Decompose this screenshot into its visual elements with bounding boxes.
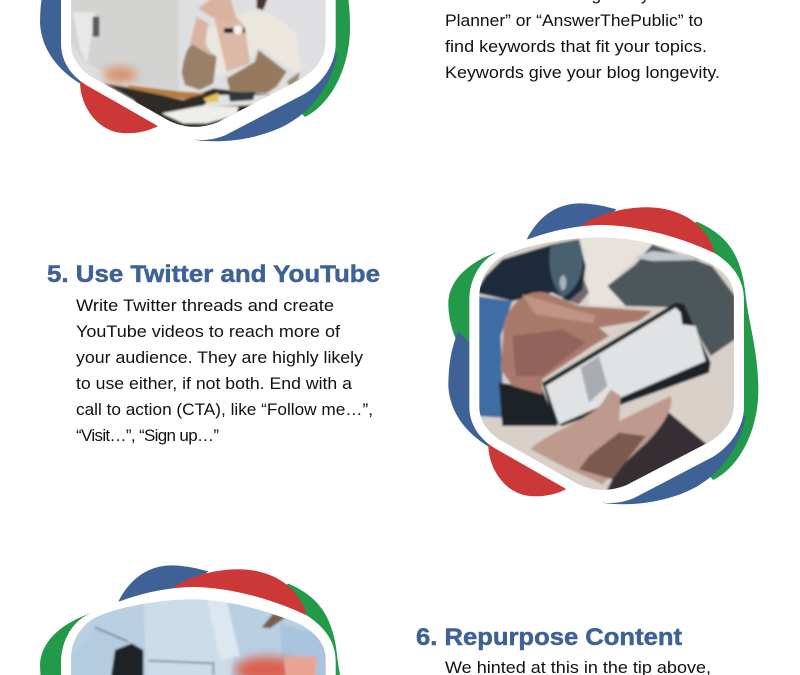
text block: tip 5 body: your audience. They are highly likely xyxy=(76,348,364,367)
text block: tip 5 body: YouTube videos to reach more of xyxy=(76,322,340,341)
heading: tip 5: 5. Use Twitter and YouTube xyxy=(47,261,380,288)
text block: tip 5 body: Write Twitter threads and create xyxy=(76,296,334,315)
text block: tip 4 body: Keywords give your blog longevity. xyxy=(445,63,720,82)
text block: tip 5 body xyxy=(76,296,373,445)
text block: tip 4 body: Planner” or “AnswerThePublic” to xyxy=(445,11,703,30)
text block: tip 5 body: call to action (CTA), like “Follow me…”, xyxy=(76,400,373,419)
panel: tip 4 photo blob xyxy=(40,0,350,141)
text block: tip 5 body: to use either, if not both. End with a xyxy=(76,374,353,393)
text block: tip 4 body xyxy=(445,0,720,82)
text block: tip 4 body: find keywords that fit your topics. xyxy=(445,37,707,56)
panel: tip 6 photo blob xyxy=(40,565,350,675)
heading: tip 6: 6. Repurpose Content xyxy=(416,624,682,651)
panel: tip 5 photo blob xyxy=(448,203,758,504)
text block: tip 5 body: “Visit…”, “Sign up…” xyxy=(76,426,219,445)
